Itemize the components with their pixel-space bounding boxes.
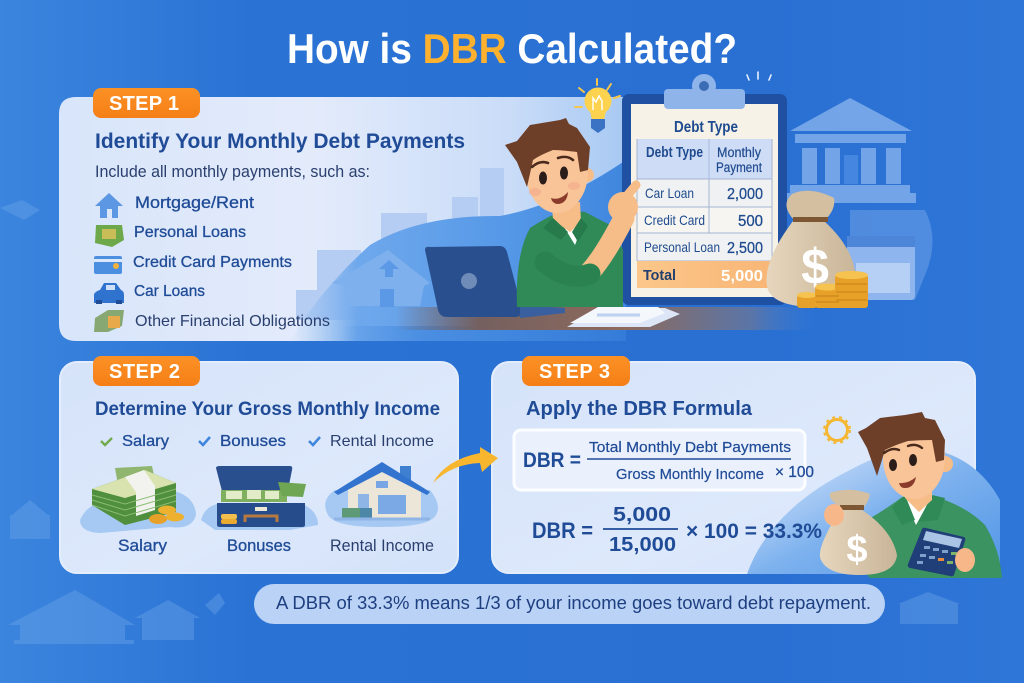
step 3 badge: STEP 3 [539, 361, 611, 383]
icon: sun gear [824, 417, 850, 443]
income labels [118, 537, 434, 555]
money bag [766, 191, 856, 307]
step 1 heading: Identify Your Monthly Debt Payments [95, 130, 465, 153]
person pointing at table [505, 118, 638, 307]
worked calculation [532, 504, 822, 556]
formula box: Gross Monthly Income [616, 466, 764, 483]
list item: other obligations [94, 310, 330, 332]
worked calculation: 5,000 [613, 504, 671, 526]
calculator [908, 528, 965, 576]
step 1 badge [93, 88, 200, 118]
step 2 badge [93, 356, 200, 386]
income labels: Rental Income [330, 537, 434, 555]
income checklist [101, 433, 434, 450]
callout: summary pill: A DBR of 33.3% means 1/3 of your income goes toward debt repayment. [276, 593, 871, 613]
table header: Monthly [717, 145, 761, 160]
table total row: 5,000 [721, 268, 763, 285]
sparkle ticks [747, 72, 771, 80]
list item: other obligations: Other Financial Obligations [135, 313, 330, 330]
city buildings [296, 168, 504, 320]
table rows: Credit Card [644, 212, 705, 228]
icon: rental house [325, 462, 438, 527]
table header: Debt Type [646, 145, 703, 161]
decorative bank background [786, 98, 932, 300]
clipboard with debt table [622, 74, 787, 305]
money bag: $ [801, 239, 829, 295]
list item: car loans [94, 283, 205, 304]
worked calculation: × 100 = 33.3% [686, 520, 822, 543]
list item: credit card: Credit Card Payments [133, 254, 292, 271]
calendar [847, 236, 915, 300]
income labels: Salary [118, 537, 168, 555]
income checklist: Bonuses [220, 433, 286, 450]
formula box: DBR = [523, 449, 581, 472]
table rows: Personal Loan [644, 239, 720, 255]
table header: Payment [716, 160, 762, 175]
step 3 heading: Apply the DBR Formula [526, 398, 753, 420]
list item: personal loans [95, 224, 246, 247]
list item: car loans: Car Loans [134, 283, 205, 300]
table rows: Car Loan [645, 185, 694, 201]
house silhouette [332, 250, 430, 307]
step 3 badge [522, 356, 630, 386]
table title: Debt Type [674, 119, 738, 136]
step 1 badge: STEP 1 [109, 93, 180, 115]
intro text: Include all monthly payments, such as: [95, 163, 370, 181]
hill [290, 160, 626, 341]
clipboard clip [664, 74, 745, 109]
income checklist: Salary [122, 433, 169, 450]
formula box: × 100 [775, 464, 814, 481]
laptop [425, 246, 565, 318]
paper on desk [567, 307, 680, 327]
callout: summary pill [254, 584, 885, 624]
list item: mortgage [95, 193, 254, 218]
income checklist: Rental Income [330, 433, 434, 450]
person with calculator and bag [820, 412, 1002, 578]
desk [395, 307, 815, 330]
table rows: 500 [738, 213, 763, 230]
icon: briefcase of cash [201, 466, 318, 530]
title: How is DBR Calculated? [287, 25, 737, 72]
step 2 heading: Determine Your Gross Monthly Income [95, 398, 440, 420]
light bulb [575, 79, 620, 133]
small money bag: $ [846, 529, 868, 571]
worked calculation: DBR = [532, 518, 593, 543]
table header [637, 139, 772, 179]
income labels: Bonuses [227, 537, 291, 555]
icon: stack of cash [80, 466, 196, 533]
coin stacks [797, 271, 868, 308]
table rows [637, 139, 772, 261]
formula box [514, 430, 814, 490]
list item: personal loans: Personal Loans [134, 224, 246, 241]
arrow from step 2 to step 3 [433, 447, 498, 483]
panel: step 2 [60, 356, 458, 573]
small money bag [820, 490, 897, 575]
table total row: Total [643, 267, 676, 284]
table rows: 2,000 [727, 186, 763, 203]
list item: credit card [94, 254, 292, 274]
panel: step 3 [492, 356, 1002, 578]
list item: mortgage: Mortgage/Rent [135, 194, 254, 212]
table rows: 2,500 [727, 240, 763, 257]
worked calculation: 15,000 [609, 534, 676, 556]
background silhouettes [0, 200, 960, 644]
table total row [637, 261, 772, 288]
step 2 badge: STEP 2 [109, 361, 181, 383]
panel: step 1 [59, 88, 626, 341]
formula box: Total Monthly Debt Payments [589, 439, 791, 456]
hill behind person [747, 448, 1000, 578]
hill lower fade [340, 326, 626, 341]
